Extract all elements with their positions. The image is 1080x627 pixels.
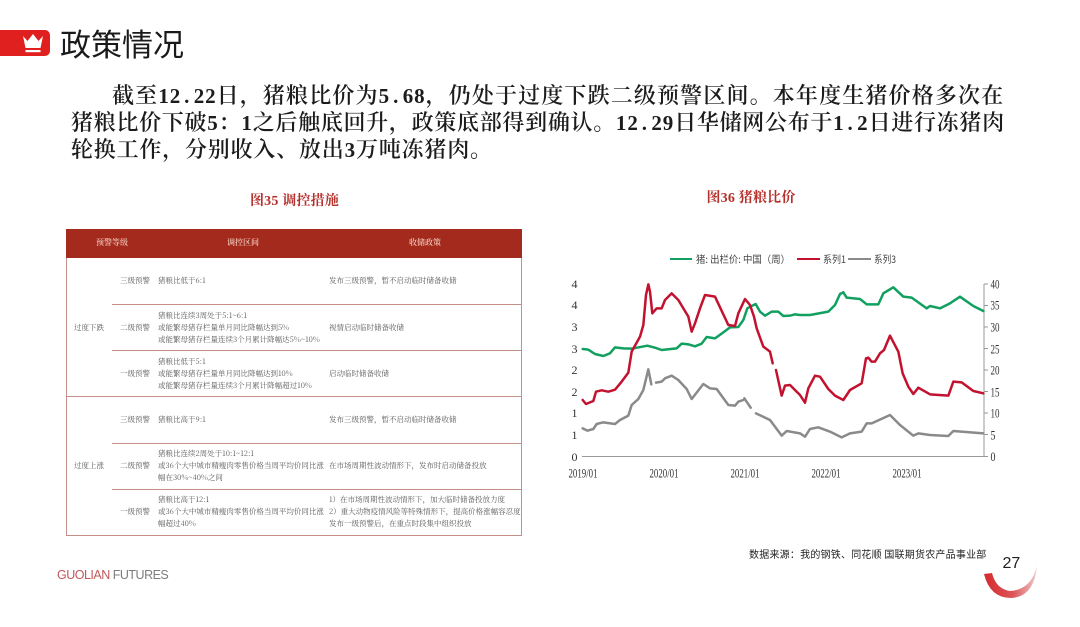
chart axes	[582, 284, 988, 456]
right axis labels: 10	[990, 406, 1000, 420]
left axis labels: 3	[572, 342, 578, 356]
chart legend	[670, 251, 896, 266]
left axis labels: 1	[572, 406, 578, 420]
panel: regulation measures table: 或能繁母猪存栏量连续3个月累计降幅超过10%	[158, 380, 312, 391]
panel: regulation measures table: 或36个大中城市精瘦肉零售价格当周平均价同比涨	[158, 460, 324, 471]
panel: regulation measures table: 猪粮比高于9:1	[158, 414, 206, 425]
panel: regulation measures table: 1）在市场周期性波动情形下，加大临时储备投放力度	[329, 494, 505, 505]
title: 政策情况	[60, 20, 184, 65]
panel: regulation measures table: 或能繁母猪存栏量单月同比降幅达到10%	[158, 368, 293, 379]
panel: regulation measures table: 一级预警	[120, 506, 150, 517]
panel: regulation measures table: 猪粮比低于5:1	[158, 356, 206, 367]
left axis labels	[572, 277, 578, 464]
chart legend: 系列3	[874, 251, 896, 266]
panel: regulation measures table: 三级预警	[120, 414, 150, 425]
rise level 1	[120, 494, 521, 529]
panel: regulation measures table: 调控区间	[227, 237, 259, 248]
panel: regulation measures table: 或能繁母猪存栏量单月同比降幅达到5%	[158, 322, 289, 333]
series 1 (red)	[583, 284, 983, 404]
panel: regulation measures table: 二级预警	[120, 460, 150, 471]
right axis labels: 25	[990, 342, 1000, 356]
icon: red crown tab	[0, 30, 50, 56]
rise level 2	[120, 448, 486, 483]
x axis labels: 2019/01	[568, 466, 598, 480]
panel: regulation measures table: 发布三级预警，暂不启动临时储备收储	[329, 414, 456, 425]
row group: excessive rise: 过度上涨	[74, 460, 104, 471]
panel: regulation measures table: 猪粮比连续3周处于5:1~6:1	[158, 310, 247, 321]
text block: policy summary: 轮换工作，分别收入、放出3万吨冻猪肉。	[71, 133, 493, 164]
left axis labels: 2	[572, 363, 578, 377]
panel: regulation measures table: 幅在30%~40%之间	[158, 472, 223, 483]
panel: regulation measures table: 预警等级	[96, 237, 128, 248]
row group: excessive fall: 过度下跌	[74, 322, 104, 333]
x axis labels: 2021/01	[730, 466, 760, 480]
panel: regulation measures table: 三级预警	[120, 275, 150, 286]
panel: regulation measures table: 幅超过40%	[158, 518, 196, 529]
panel: regulation measures table: 或能繁母猪存栏量连续3个月累计降幅达5%~10%	[158, 334, 320, 345]
x axis labels: 2020/01	[650, 466, 678, 480]
heading: figure 36: 图36 猪粮比价	[706, 191, 796, 206]
right axis labels	[990, 276, 1000, 464]
panel: regulation measures table: 收储政策	[409, 237, 441, 248]
text block: policy summary: 猪粮比价下破5：1之后触底回升，政策底部得到确认。12.29日华储网公布于1.2日进行冻猪肉	[71, 106, 1005, 137]
left axis labels: 0	[572, 450, 578, 464]
x axis labels: 2022/01	[812, 466, 840, 480]
brand logo text: GUOLIAN FUTURES	[57, 568, 168, 582]
left axis labels: 2	[572, 385, 578, 399]
chart legend: 猪: 出栏价: 中国（周）	[696, 251, 790, 266]
panel: regulation measures table: 发布一级预警后，在重点时段集中组织投放	[329, 518, 472, 529]
panel: regulation measures table: 2）重大动物疫情风险等特殊情形下，提高价格涨幅容忍度	[329, 506, 521, 517]
panel: regulation measures table: 或36个大中城市精瘦肉零售价格当周平均价同比涨	[158, 506, 324, 517]
heading: figure 35: 图35 调控措施	[250, 194, 339, 209]
fall level 1	[120, 356, 389, 391]
right axis labels: 5	[990, 428, 996, 442]
series: hog price (green)	[583, 287, 983, 356]
rise level 3	[120, 414, 456, 425]
panel: regulation measures table: 一级预警	[120, 368, 150, 379]
right axis labels: 0	[990, 449, 996, 464]
panel: regulation measures table: 启动临时储备收储	[329, 368, 389, 379]
icon: page number swoosh	[984, 566, 1037, 598]
text block: policy summary	[71, 79, 1005, 164]
left axis labels: 4	[572, 298, 578, 312]
right axis labels: 35	[990, 298, 1000, 312]
panel: regulation measures table: 猪粮比连续2周处于10:1~12:1	[158, 448, 254, 459]
series 3 (gray)	[583, 369, 983, 437]
text block: policy summary: 截至12.22日，猪粮比价为5.68，仍处于过度下跌二级预警区间。本年度生猪价格多次在	[112, 79, 1004, 110]
panel: regulation measures table: 二级预警	[120, 322, 150, 333]
data source note: 数据来源：我的钢铁、同花顺 国联期货农产品事业部	[749, 546, 987, 561]
panel: regulation measures table: 猪粮比低于6:1	[158, 275, 206, 286]
x axis labels: 2023/01	[892, 466, 922, 480]
panel: regulation measures table: 在市场周期性波动情形下，发布时启动储备投放	[329, 460, 486, 471]
panel: regulation measures table: 猪粮比高于12:1	[158, 494, 209, 505]
left axis labels: 4	[572, 277, 578, 291]
right axis labels: 20	[990, 362, 1000, 378]
panel: regulation measures table: 视情启动临时储备收储	[329, 322, 404, 333]
panel: regulation measures table: 发布三级预警，暂不启动临时储备收储	[329, 275, 456, 286]
fall level 3	[120, 275, 456, 286]
chart legend: 系列1	[823, 251, 846, 266]
fall level 2	[120, 310, 404, 345]
right axis labels: 40	[990, 276, 1000, 292]
right axis labels: 15	[990, 384, 1000, 400]
table header band	[66, 229, 522, 258]
x axis labels	[568, 466, 922, 480]
left axis labels: 3	[572, 320, 578, 334]
page number: 27	[1002, 555, 1020, 572]
right axis labels: 30	[990, 320, 1000, 334]
left axis labels: 1	[572, 428, 578, 442]
